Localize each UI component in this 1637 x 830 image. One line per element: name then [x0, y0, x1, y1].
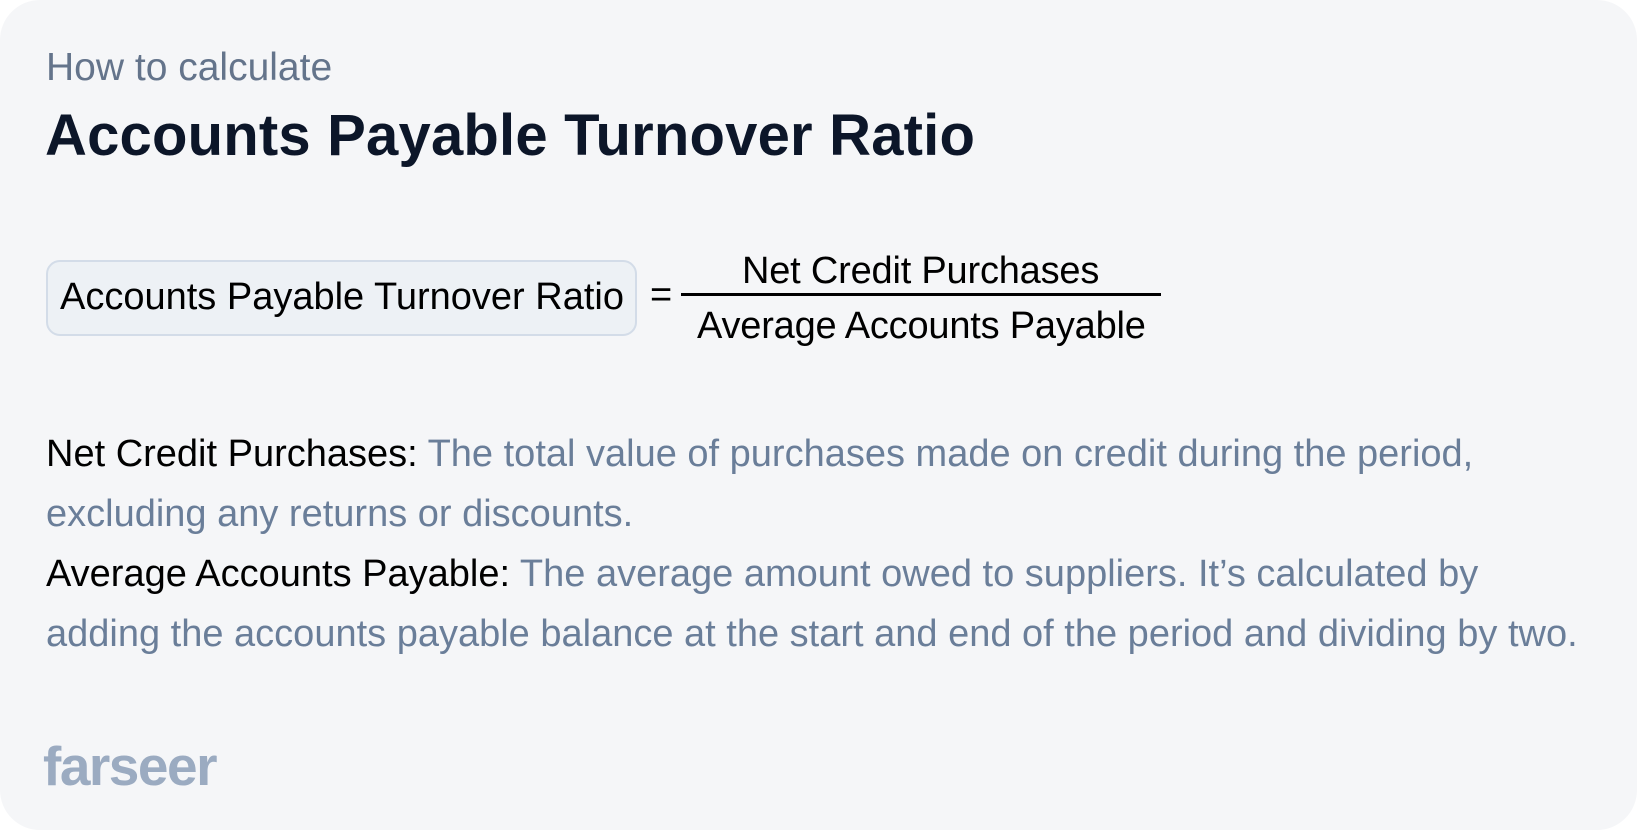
definitions — [46, 433, 1578, 655]
definitions: excluding any returns or discounts. — [46, 493, 633, 535]
equals sign: = — [650, 274, 672, 316]
title: Accounts Payable Turnover Ratio — [45, 103, 975, 168]
subtitle: How to calculate — [46, 46, 332, 89]
formula label box — [46, 260, 637, 336]
formula label text: Accounts Payable Turnover Ratio — [60, 276, 624, 318]
definitions: Net Credit Purchases: The total value of purchases made on credit during the period, — [46, 433, 1473, 475]
fraction bar — [681, 293, 1161, 296]
numerator: Net Credit Purchases — [742, 250, 1099, 292]
formula — [46, 250, 1161, 347]
definitions: adding the accounts payable balance at the start and end of the period and dividing by two. — [46, 613, 1578, 655]
denominator: Average Accounts Payable — [697, 305, 1146, 347]
definitions: Average Accounts Payable: The average amount owed to suppliers. It’s calculated by — [46, 553, 1478, 595]
logo: farseer: farseer — [43, 735, 216, 797]
